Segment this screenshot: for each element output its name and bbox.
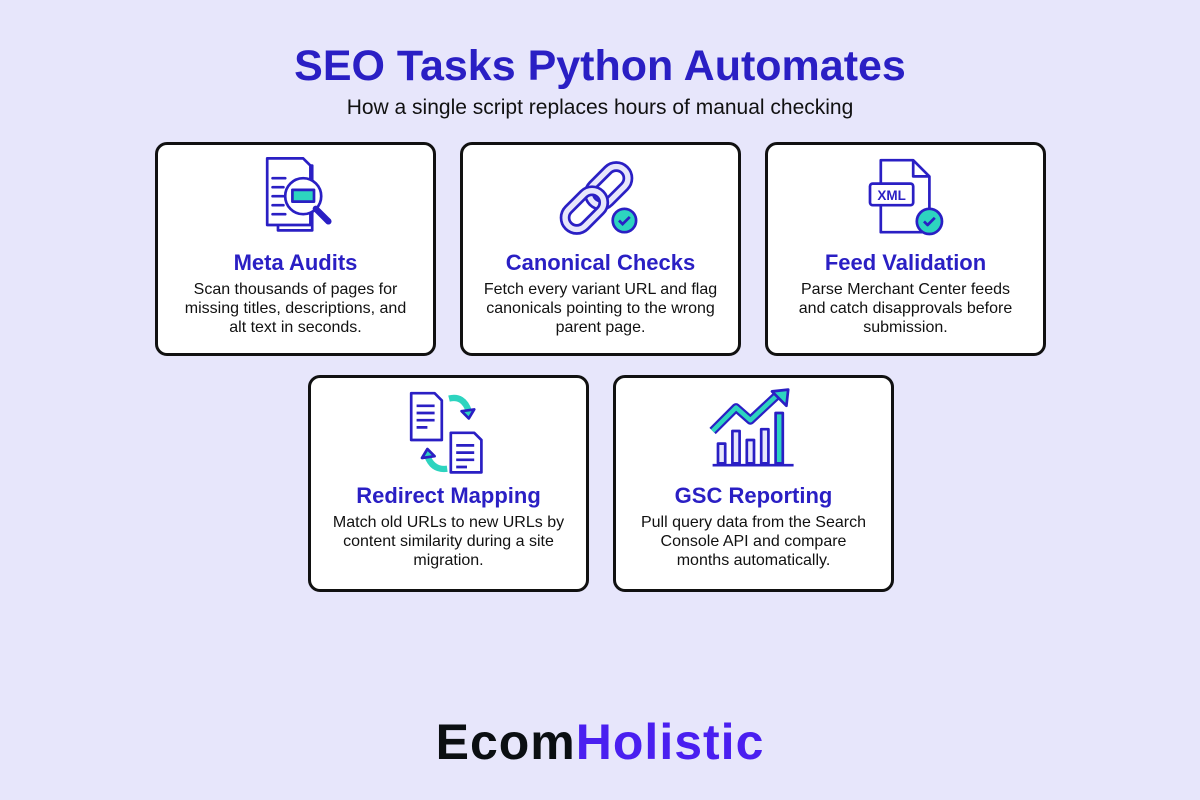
panel: meta audits: Meta Audits	[234, 250, 357, 275]
icon: XML file with check: XML	[877, 188, 905, 203]
icon: XML file with check	[868, 158, 944, 236]
panel: redirect mapping	[308, 375, 589, 592]
panel: gsc reporting: GSC Reporting	[675, 483, 832, 508]
icon: swapping documents	[410, 392, 483, 474]
panel: gsc reporting	[613, 375, 894, 592]
panel: feed validation: Parse Merchant Center feeds and catch disapprovals before submission.	[799, 281, 1012, 336]
panel: feed validation: Feed Validation	[825, 250, 986, 275]
logo: EcomHolistic	[436, 714, 764, 770]
panel: canonical checks	[460, 142, 741, 356]
panel: canonical checks: Canonical Checks	[506, 250, 695, 275]
subtitle: How a single script replaces hours of manual checking	[347, 96, 853, 119]
icon: growth chart	[710, 388, 794, 466]
icon: chain link with check	[560, 161, 638, 235]
panel: feed validation	[765, 142, 1046, 356]
panel: gsc reporting: Pull query data from the Search Console API and compare months automatically.	[641, 514, 866, 569]
panel: meta audits: Scan thousands of pages for missing titles, descriptions, and alt text in seconds.	[185, 281, 406, 336]
panel: meta audits	[155, 142, 436, 356]
panel: canonical checks: Fetch every variant URL and flag canonicals pointing to the wrong parent page.	[484, 281, 717, 336]
title: SEO Tasks Python Automates	[294, 42, 906, 90]
icon: document magnifier	[266, 157, 332, 232]
panel: redirect mapping: Match old URLs to new URLs by content similarity during a site migration.	[333, 514, 564, 569]
panel: redirect mapping: Redirect Mapping	[356, 483, 541, 508]
